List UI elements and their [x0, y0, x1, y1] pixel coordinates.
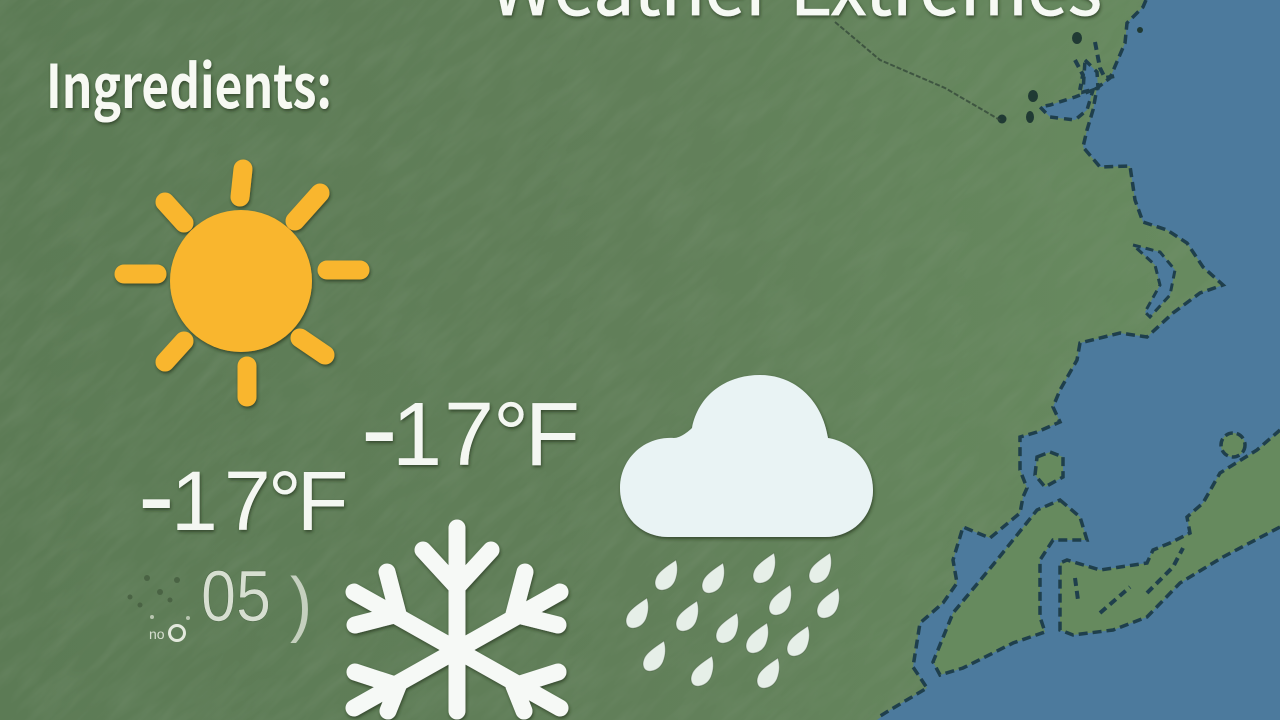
- coastline: [877, 0, 1223, 718]
- temperature: lower reading: -: [138, 434, 175, 557]
- temperature: upper reading: °: [493, 385, 529, 485]
- temperature: upper reading: F: [525, 385, 580, 485]
- upper bay inlet: [1040, 60, 1098, 120]
- temperature: lower reading: °: [268, 454, 302, 548]
- temperature: lower reading: 1: [171, 454, 218, 548]
- icon: rain cloud: [620, 375, 873, 688]
- small coastal island: [1035, 452, 1063, 487]
- long island fill: [1060, 430, 1280, 635]
- cape lagoon: [1133, 245, 1175, 317]
- faded garbled reading: 05: [201, 557, 271, 637]
- cloud: [620, 375, 873, 537]
- temperature: upper reading: 7: [444, 385, 494, 485]
- heading: ingredients: Ingredients:: [46, 39, 332, 126]
- icon: snowflake: [354, 528, 560, 711]
- raindrops: [626, 553, 839, 688]
- state border: [835, 22, 1000, 120]
- faded garbled reading: [128, 557, 312, 644]
- temperature: upper reading: 1: [392, 385, 442, 485]
- icon: sun: [124, 169, 360, 397]
- temperature: lower reading: 7: [224, 454, 271, 548]
- faded garbled reading: ): [290, 564, 312, 644]
- new jersey peninsula: [933, 500, 1087, 675]
- long island lagoon: [1075, 548, 1183, 613]
- upper coast marks: [998, 27, 1143, 124]
- offshore islet: [1221, 433, 1245, 457]
- temperature: upper reading: -: [361, 367, 398, 490]
- temperature: lower reading: F: [297, 454, 348, 548]
- long island coast: [1060, 430, 1280, 635]
- faded garbled reading: no: [149, 626, 165, 642]
- ocean fill: [877, 0, 1280, 720]
